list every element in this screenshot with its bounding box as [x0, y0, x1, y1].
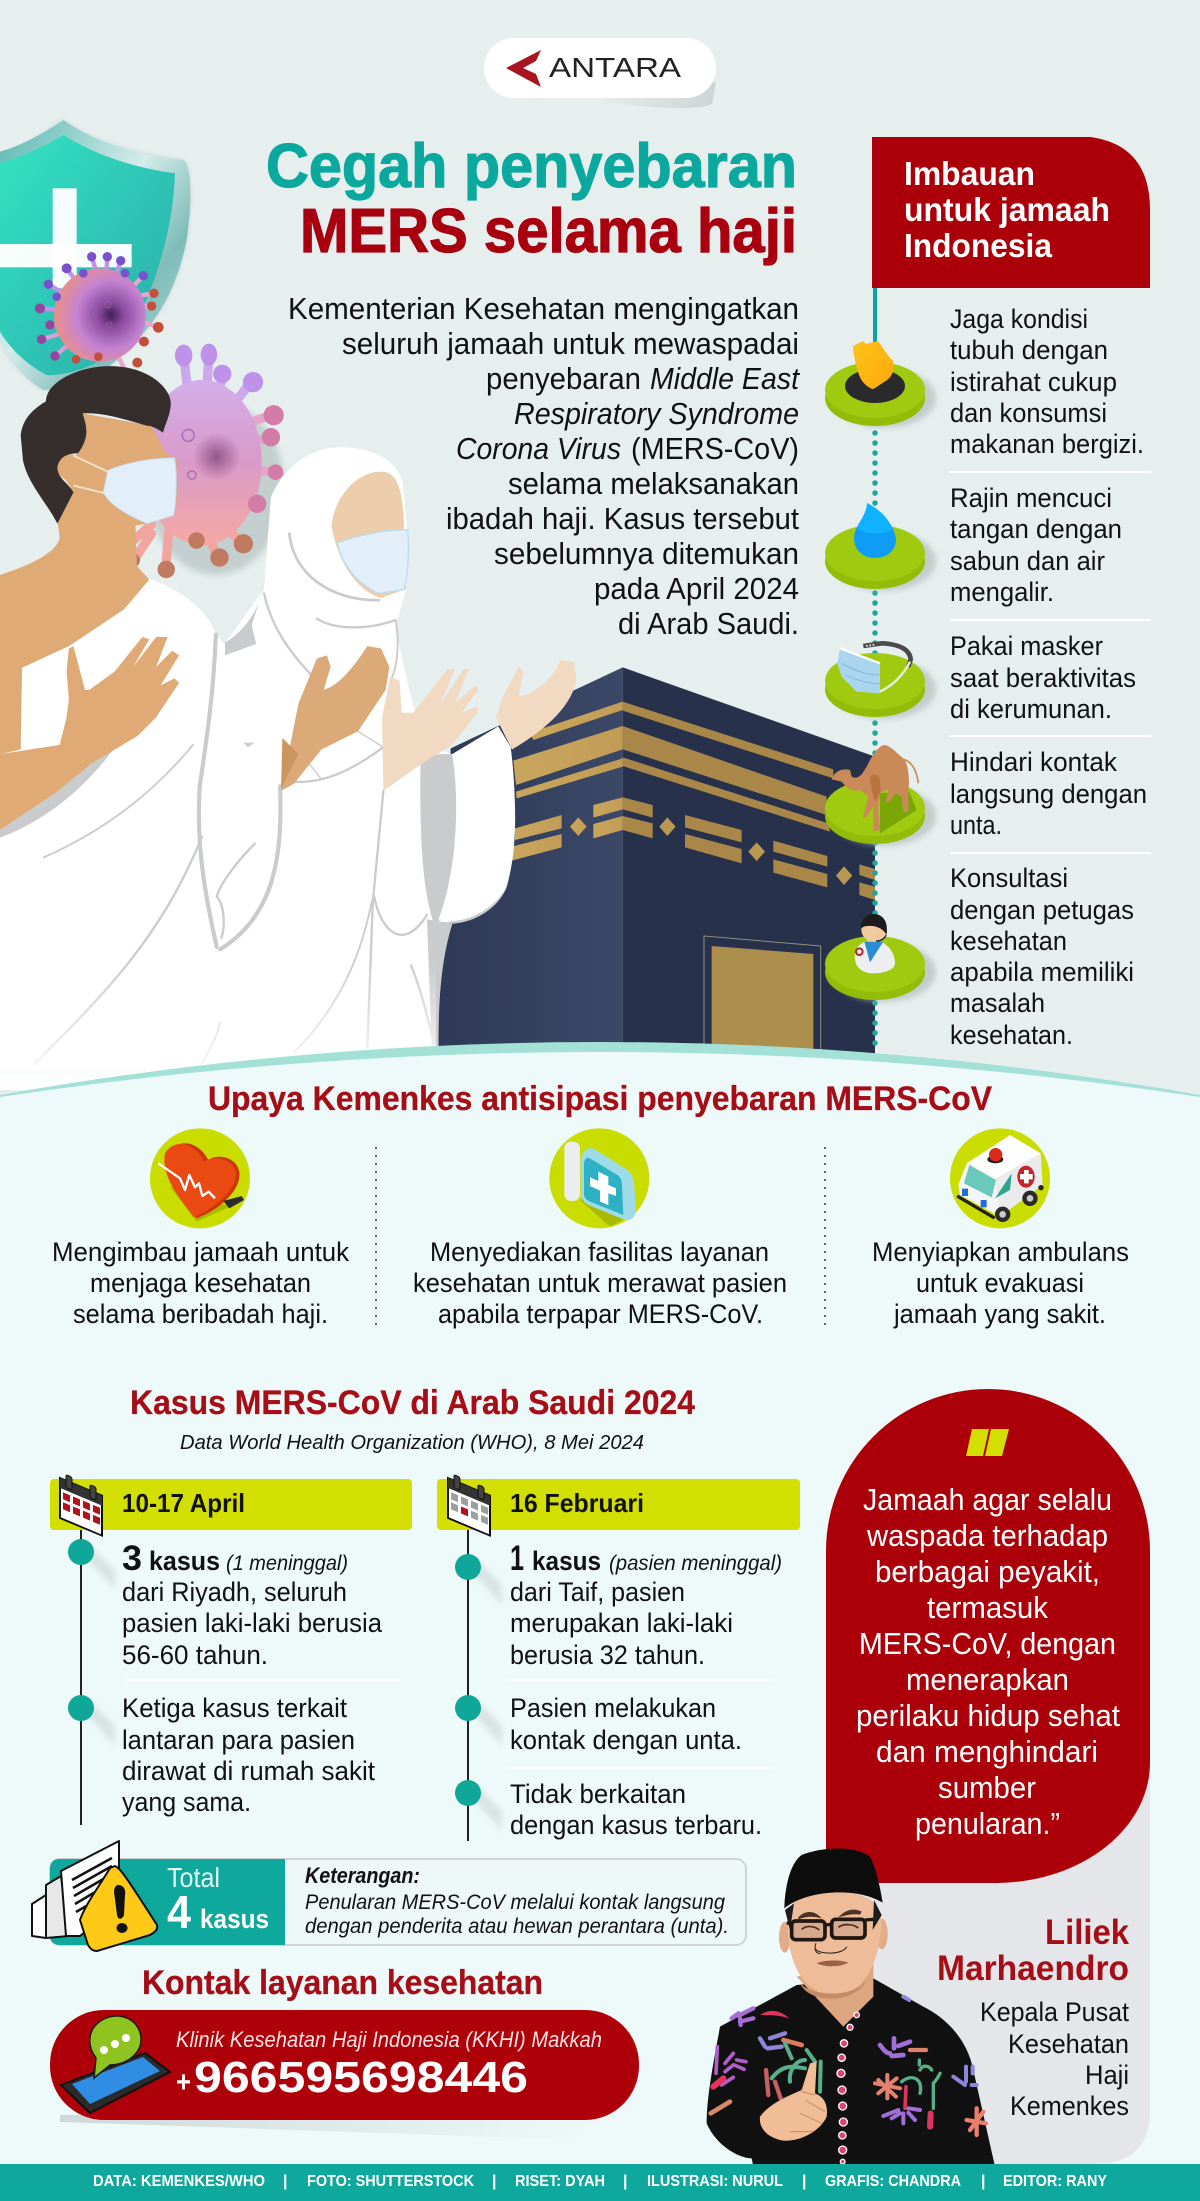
panel: contact pill: 966595698446 [194, 2053, 528, 2102]
panel: contact pill [50, 2010, 639, 2140]
timeline connector [873, 288, 877, 1050]
text: menyediakan: kesehatan untuk merawat pasien [413, 1268, 787, 1298]
woman face and mask [332, 472, 406, 598]
intro text block: Corona Virus [456, 432, 621, 466]
man hair [21, 366, 171, 524]
head [779, 1922, 790, 1953]
panel: quote bubble: dan menghindari [876, 1734, 1098, 1769]
list: imbauan items: sabun dan air [950, 546, 1105, 576]
logo: ANTARA [484, 38, 716, 108]
shirt [707, 1978, 995, 2167]
panel: quote bubble [826, 1389, 1150, 1883]
illustration: pilgrims man and woman [0, 366, 576, 1070]
intro text block: Kementerian Kesehatan mengingatkan [288, 292, 799, 326]
title [266, 132, 797, 266]
list: imbauan items: Jaga kondisi [950, 304, 1088, 334]
placket [837, 2012, 859, 2164]
man mask [103, 458, 176, 524]
list: imbauan items [950, 304, 1151, 1050]
intro text block: pada April 2024 [594, 572, 799, 606]
intro text block: Middle East [650, 362, 800, 396]
list: imbauan items: apabila memiliki [950, 957, 1134, 987]
panel: case column April: lantaran para pasien [122, 1725, 355, 1755]
panel: case column April: 10-17 April [122, 1488, 245, 1518]
panel: case column April [50, 1472, 412, 1825]
speaker name and title [937, 1913, 1130, 2121]
panel: speaker background [826, 1700, 1150, 2164]
neck [797, 1963, 873, 2027]
panel: total cases and note: Penularan MERS-CoV melalui kontak langsung [305, 1890, 725, 1914]
illustration: pink virus large [126, 344, 285, 578]
panel: case column April: dirawat di rumah sakit [122, 1756, 375, 1786]
panel: quote bubble: waspada terhadap [866, 1518, 1108, 1553]
panel: case column April: (1 meninggal) [226, 1552, 348, 1575]
list: imbauan items: Rajin mencuci [950, 483, 1112, 513]
heading: Kasus MERS-CoV: Kasus MERS-CoV di Arab Saudi 2024 [130, 1384, 695, 1422]
panel: total cases and note: Keterangan: [305, 1863, 420, 1888]
list: imbauan items: Konsultasi [950, 863, 1068, 893]
footer credits: GRAFIS: CHANDRA [825, 2173, 961, 2190]
subheading: data source: Data World Health Organization (WHO), 8 Mei 2024 [180, 1431, 644, 1454]
panel: total cases and note: kasus [200, 1904, 269, 1934]
woman hands [281, 646, 389, 791]
illustration: speaker portrait [707, 1848, 995, 2167]
logo: ANTARA: ANTARA [549, 52, 681, 83]
text: mengimbau [52, 1237, 350, 1329]
eyebrows and glasses [798, 1910, 862, 1919]
hand [760, 2062, 827, 2141]
icon: disc with face mask [825, 643, 936, 719]
list: imbauan items: istirahat cukup [950, 367, 1117, 397]
panel: case column Februari: kasus [532, 1546, 601, 1576]
panel: case column April: yang sama. [122, 1787, 251, 1817]
intro text block: sebelumnya ditemukan [494, 537, 799, 571]
list: imbauan items: kesehatan. [950, 1020, 1073, 1050]
footer credits: | [623, 2173, 627, 2190]
panel: quote bubble: sumber [938, 1770, 1036, 1805]
illustration: shield with cross [0, 120, 191, 390]
illustration: Kaaba [437, 667, 875, 1063]
panel: case column Februari: kontak dengan unta. [510, 1725, 742, 1755]
text: menyiapkan [872, 1237, 1129, 1329]
panel: total cases and note: dengan penderita atau hewan perantara (unta). [305, 1914, 729, 1938]
panel: contact pill: + [176, 2066, 191, 2099]
woman grey folds [0, 586, 513, 1046]
icon: disc with camel [825, 745, 936, 846]
panel: quote bubble: perilaku hidup sehat [856, 1698, 1120, 1733]
intro text block: seluruh jamaah untuk mewaspadai [342, 327, 799, 361]
list: imbauan items: dan konsumsi [950, 398, 1107, 428]
title: Cegah penyebaran [266, 132, 797, 201]
list: imbauan items: masalah [950, 988, 1045, 1018]
intro text block: selama melaksanakan [508, 467, 799, 501]
list: imbauan items: tangan dengan [950, 514, 1122, 544]
man hand [0, 637, 179, 830]
section background with teal arc [0, 1042, 1200, 2201]
speaker name and title: Kesehatan [1008, 2029, 1129, 2059]
panel: quote bubble: termasuk [927, 1590, 1048, 1625]
icon: phone with chat bubble [61, 2016, 170, 2113]
icon: ambulance [950, 1128, 1050, 1228]
icon: disc with water drop [825, 503, 936, 591]
intro text block [288, 292, 800, 641]
panel: total cases and note [50, 1859, 746, 1945]
icon: medical kit [549, 1128, 649, 1228]
list: imbauan items: Pakai masker [950, 631, 1103, 661]
panel: Imbauan heading: untuk jamaah [904, 191, 1110, 228]
intro text block: Respiratory Syndrome [514, 397, 799, 431]
icon: heart with pulse [150, 1128, 250, 1228]
fade to white at base of illustration [0, 960, 436, 1090]
list: imbauan items: dengan petugas [950, 895, 1134, 925]
text: menyiapkan: jamaah yang sakit. [893, 1299, 1106, 1329]
footer credits: FOTO: SHUTTERSTOCK [307, 2173, 474, 2190]
list: imbauan items: tubuh dengan [950, 335, 1108, 365]
footer credits: | [802, 2173, 806, 2190]
panel: case column Februari: merupakan laki-laki [510, 1608, 733, 1638]
panel: case column Februari: dengan kasus terbaru. [510, 1810, 762, 1840]
speaker name and title: Kemenkes [1010, 2091, 1129, 2121]
panel: Imbauan heading [872, 137, 1150, 288]
panel: quote bubble: menerapkan [906, 1662, 1069, 1697]
footer credits: ILUSTRASI: NURUL [647, 2173, 783, 2190]
panel: contact pill: Klinik Kesehatan Haji Indonesia (KKHI) Makkah [176, 2027, 602, 2052]
panel: case column April: 3 [122, 1539, 142, 1578]
intro text block: penyebaran [486, 362, 641, 396]
panel: case column Februari: berusia 32 tahun. [510, 1640, 705, 1670]
panel: case column April: Ketiga kasus terkait [122, 1693, 347, 1723]
panel: Imbauan heading: Indonesia [904, 227, 1053, 264]
list: imbauan items: mengalir. [950, 577, 1054, 607]
speaker name and title: Haji [1085, 2060, 1129, 2090]
panel: quote bubble: MERS-CoV, dengan [859, 1626, 1116, 1661]
heading: Kontak layanan: Kontak layanan kesehatan [142, 1964, 543, 2002]
text: menyediakan: Menyediakan fasilitas layanan [430, 1237, 769, 1267]
panel: case column Februari: dari Taif, pasien [510, 1577, 685, 1607]
icon: disc with doctor [825, 914, 936, 1002]
panel: case column Februari: Tidak berkaitan [510, 1779, 686, 1809]
list: imbauan items: unta. [950, 810, 1002, 840]
footer credits [0, 2164, 1200, 2201]
text: mengimbau: selama beribadah haji. [73, 1299, 328, 1329]
panel: quote bubble: penularan.” [915, 1806, 1060, 1841]
footer credits: RISET: DYAH [515, 2173, 605, 2190]
speaker name and title: Liliek [1045, 1913, 1130, 1952]
icon: disc with flame [825, 341, 936, 428]
intro text block: ibadah haji. Kasus tersebut [446, 502, 800, 536]
footer credits: EDITOR: RANY [1003, 2173, 1107, 2190]
batik pattern [711, 1997, 986, 2135]
panel: case column Februari: Pasien melakukan [510, 1693, 716, 1723]
white garments [0, 447, 515, 1070]
panel: case column April: dari Riyadh, seluruh [122, 1577, 347, 1607]
panel: total cases and note: 4 [167, 1886, 191, 1938]
icon: quote mark [966, 1429, 1009, 1456]
footer credits: | [981, 2173, 985, 2190]
icon: documents and warning [32, 1841, 157, 1951]
list: imbauan items: makanan bergizi. [950, 429, 1144, 459]
text: mengimbau: menjaga kesehatan [90, 1268, 311, 1298]
text: menyediakan: apabila terpapar MERS-CoV. [438, 1299, 763, 1329]
list: imbauan items: kesehatan [950, 926, 1067, 956]
illustration: purple virus small [35, 252, 164, 368]
intro text block: (MERS-CoV) [631, 432, 799, 466]
panel: case column Februari: (pasien meninggal) [609, 1552, 782, 1575]
panel: quote bubble: Jamaah agar selalu [863, 1482, 1112, 1517]
panel: case column April: 56-60 tahun. [122, 1640, 268, 1670]
footer credits: DATA: KEMENKES/WHO [93, 2173, 265, 2190]
text: mengimbau: Mengimbau jamaah untuk [52, 1237, 350, 1267]
text: menyiapkan: untuk evakuasi [916, 1268, 1084, 1298]
list: imbauan items: langsung dengan [950, 779, 1147, 809]
panel: total cases and note: Total [167, 1862, 220, 1893]
panel: case column Februari: 1 [510, 1539, 524, 1578]
list: imbauan items: di kerumunan. [950, 694, 1112, 724]
man skin [0, 413, 177, 754]
speaker name and title: Kepala Pusat [980, 1997, 1130, 2027]
panel: case column April: kasus [149, 1546, 220, 1576]
heading: Upaya Kemenkes: Upaya Kemenkes antisipasi penyebaran MERS-CoV [208, 1080, 992, 1118]
footer credits: | [492, 2173, 496, 2190]
panel: case column Februari [437, 1472, 800, 1841]
cap [784, 1848, 883, 1908]
panel: case column April: pasien laki-laki berusia [122, 1608, 383, 1638]
list: imbauan items: Hindari kontak [950, 747, 1118, 777]
intro text block: di Arab Saudi. [618, 607, 799, 641]
list: imbauan items: saat beraktivitas [950, 663, 1136, 693]
panel: quote bubble: berbagai peyakit, [875, 1554, 1100, 1589]
footer credits: | [283, 2173, 287, 2190]
title: MERS selama haji [300, 197, 797, 266]
text: menyiapkan: Menyiapkan ambulans [872, 1237, 1129, 1267]
panel: Imbauan heading: Imbauan [904, 155, 1035, 192]
panel: case column Februari: 16 Februari [510, 1488, 644, 1518]
speaker name and title: Marhaendro [937, 1949, 1129, 1988]
text: menyediakan [413, 1237, 787, 1329]
